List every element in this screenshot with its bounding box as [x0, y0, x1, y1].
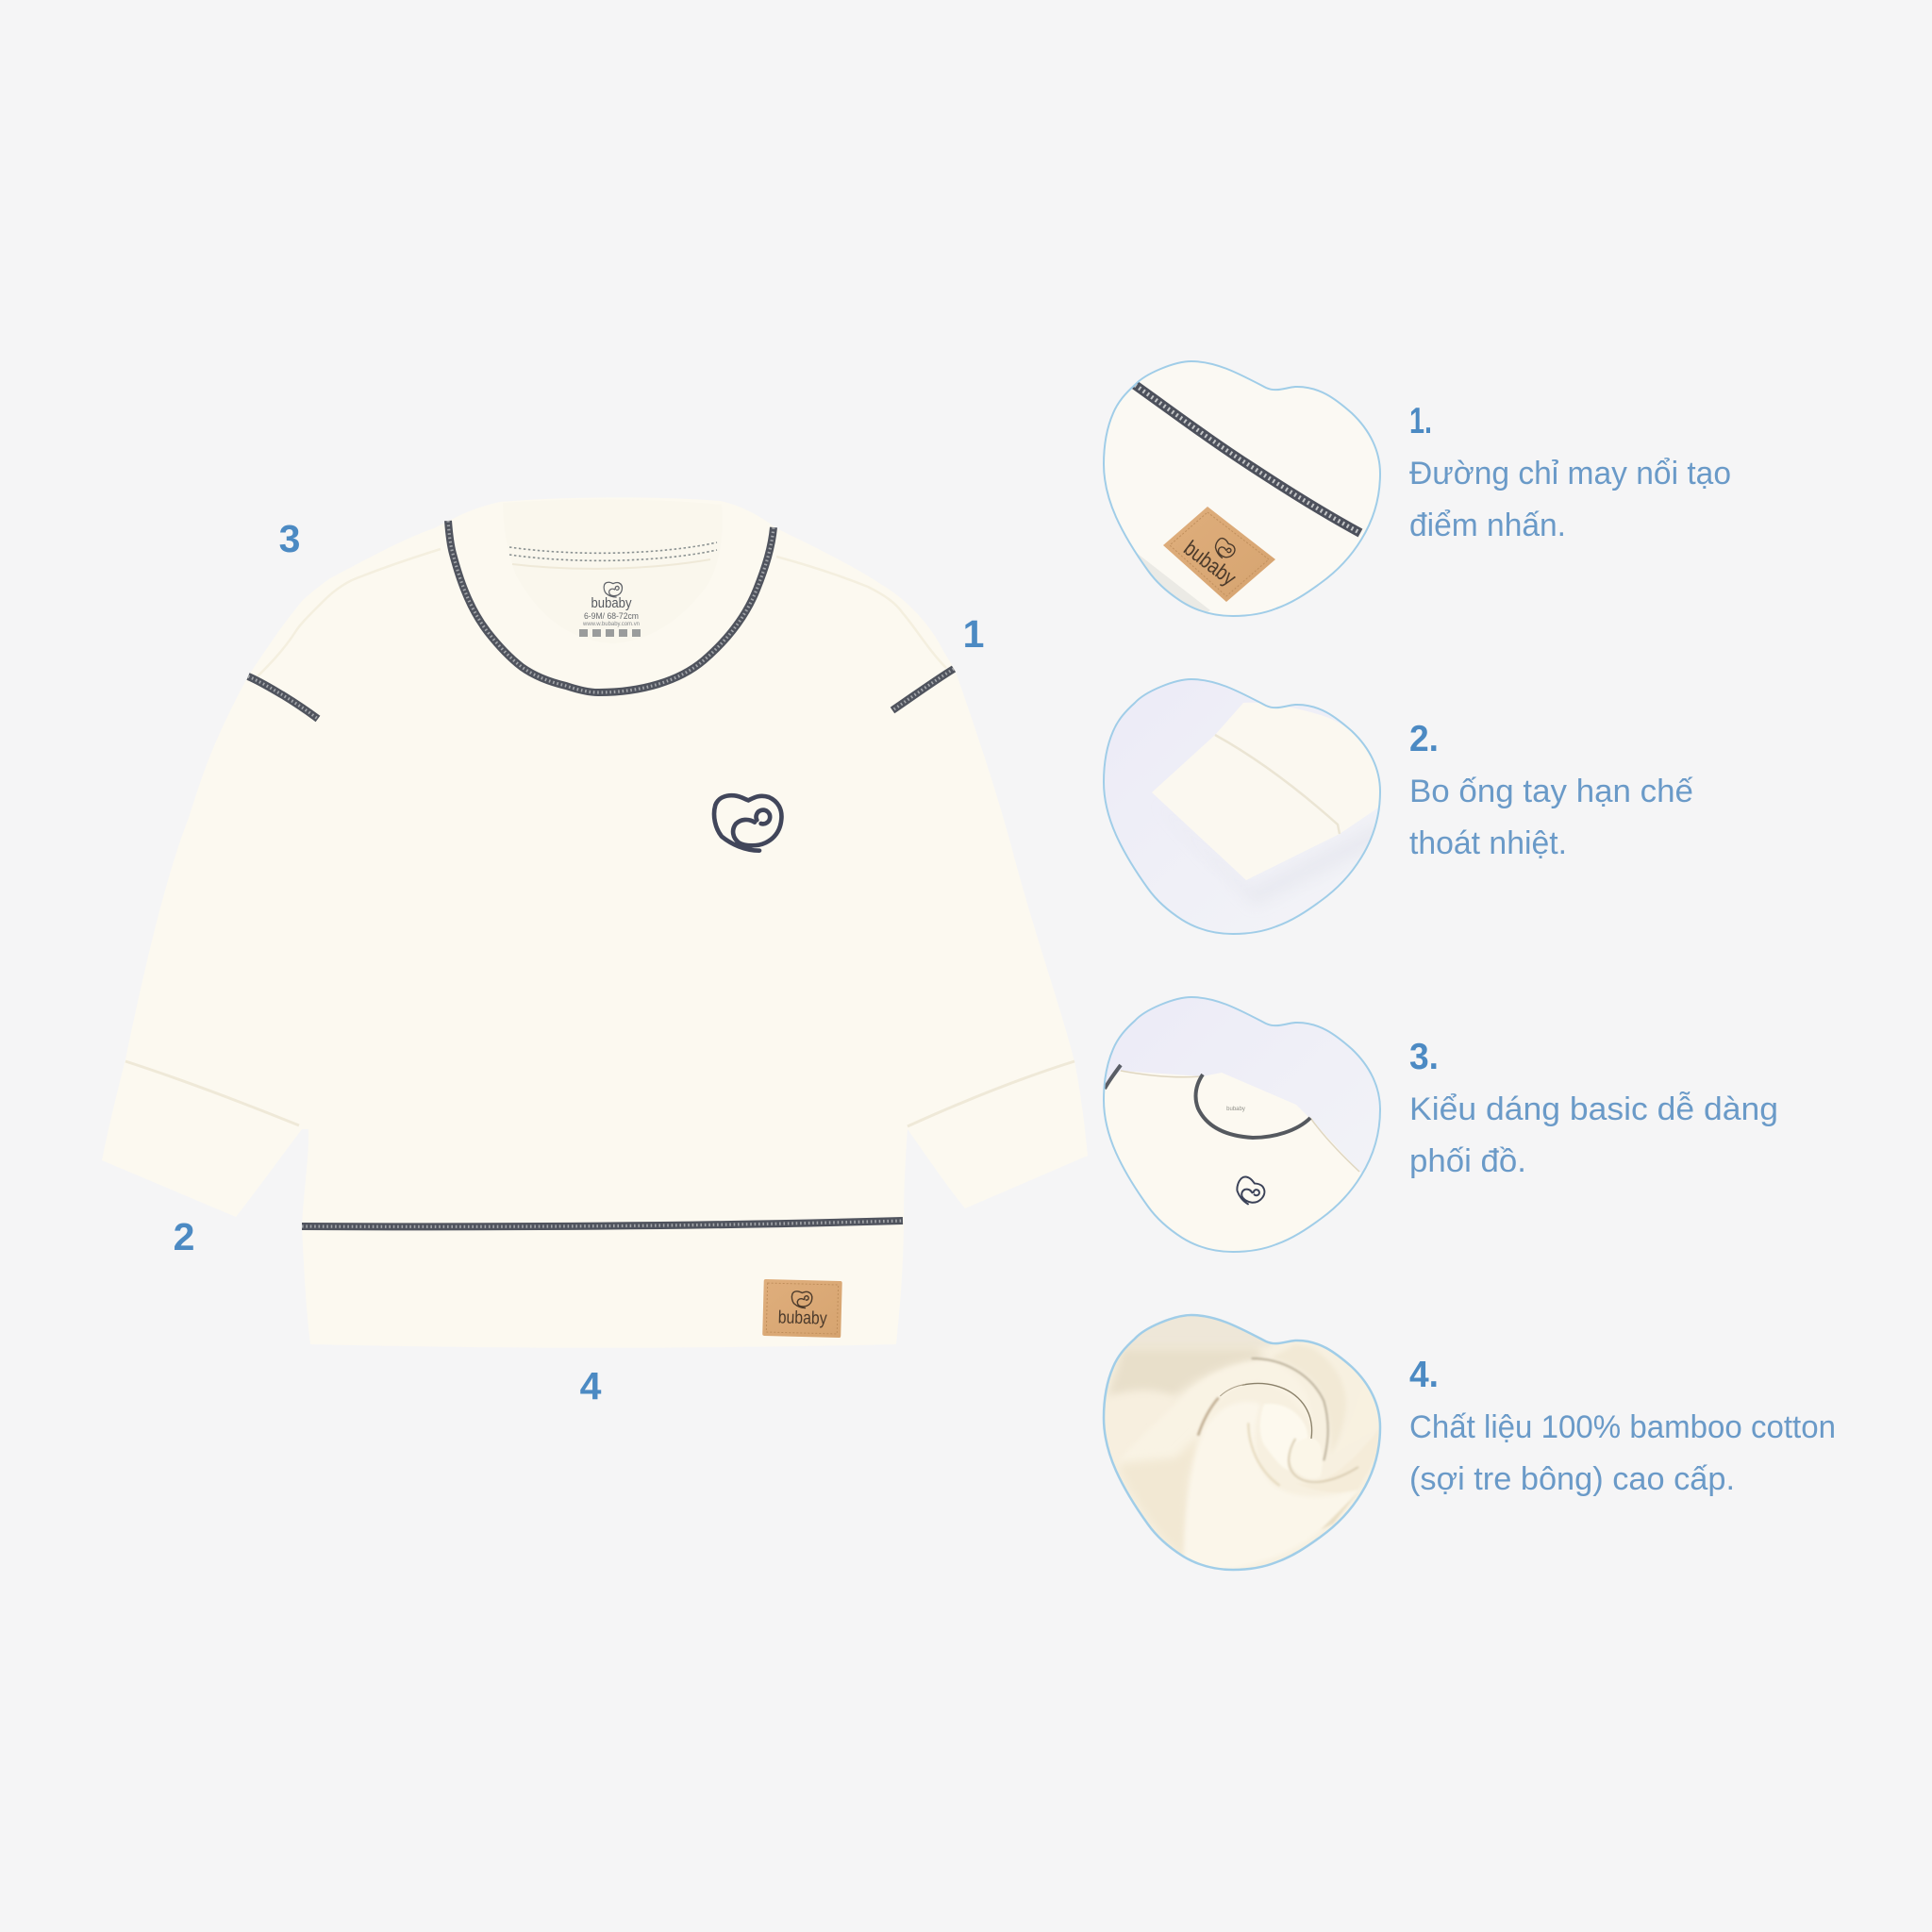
- sweater body and sleeves: [102, 497, 1088, 1348]
- neck label size: 6-9M/ 68-72cm: [584, 611, 639, 621]
- neck stitching: [448, 521, 774, 692]
- shoulder seams: [258, 549, 946, 676]
- neck label care icons: [579, 629, 641, 637]
- heart 1: stitching detail: [1104, 361, 1380, 618]
- feature 4 line 1: Chất liệu 100% bamboo cotton: [1409, 1409, 1836, 1445]
- label stitch: [766, 1283, 839, 1334]
- feature 3 line 2: phối đồ.: [1409, 1143, 1526, 1179]
- fabric folds: [1108, 1317, 1360, 1568]
- tag brand: bubaby: [1179, 536, 1241, 591]
- sleeve stitch: [1105, 1065, 1121, 1089]
- heart 2: cuff detail: [1104, 679, 1387, 934]
- marker 3: 3: [279, 517, 300, 560]
- neck label logo: [604, 582, 622, 597]
- cuff fold: [1215, 735, 1340, 834]
- feature 4 number: 4.: [1409, 1355, 1439, 1395]
- feature 1 line 2: điểm nhấn.: [1409, 508, 1566, 543]
- leather tag: [1163, 507, 1275, 602]
- heart 3: basic shape detail: [1104, 997, 1387, 1261]
- right sleeve stitching: [892, 669, 954, 710]
- stitch line: [1135, 385, 1360, 533]
- feature 2 line 2: thoát nhiệt.: [1409, 825, 1567, 861]
- shirt body: [1105, 1072, 1361, 1251]
- feature 1 number: 1.: [1409, 401, 1432, 441]
- feature 4 line 2: (sợi tre bông) cao cấp.: [1409, 1461, 1735, 1497]
- neck label url: www.w.bubaby.com.vn: [582, 622, 640, 627]
- neck label brand: bubaby: [591, 595, 632, 611]
- marker 4: 4: [580, 1364, 602, 1407]
- neck stitch: [1196, 1074, 1310, 1138]
- neck tag text: bubaby: [1226, 1107, 1245, 1112]
- shoulder seams: [1121, 1071, 1359, 1172]
- tag logo: [1215, 538, 1236, 558]
- back collar seam: [512, 559, 710, 569]
- feature 3 number: 3.: [1409, 1037, 1439, 1077]
- sleeve cuff: [1152, 703, 1387, 880]
- neck label: [579, 582, 641, 637]
- feature 2 text: [1409, 719, 1693, 861]
- label logo: [791, 1291, 812, 1308]
- feature 1 text: [1409, 401, 1731, 543]
- feature 3 text: [1409, 1037, 1778, 1179]
- cuff shadow: [1156, 802, 1382, 906]
- sweater product photo: [102, 497, 1088, 1348]
- chest embroidered logo: [714, 795, 781, 851]
- hem stitching: [302, 1221, 903, 1226]
- feature 4 text: [1409, 1355, 1836, 1497]
- left sleeve stitching: [248, 676, 318, 719]
- tag stitch: [1170, 512, 1269, 596]
- mini chest logo: [1236, 1175, 1266, 1206]
- feature 2 number: 2.: [1409, 719, 1439, 759]
- neck opening: [503, 499, 723, 643]
- feature 1 line 1: Đường chỉ may nổi tạo: [1409, 456, 1731, 491]
- cuff seams: [125, 1061, 1074, 1126]
- label brand: bubaby: [777, 1307, 827, 1329]
- back collar stitching lower: [509, 550, 717, 560]
- tan leather label: [762, 1279, 842, 1338]
- heart 4: fabric swirl: [1094, 1307, 1380, 1571]
- marker 2: 2: [174, 1215, 194, 1258]
- back collar stitching upper: [509, 542, 717, 553]
- marker 1: 1: [963, 612, 984, 656]
- feature 2 line 1: Bo ống tay hạn chế: [1409, 774, 1693, 809]
- feature 3 line 1: Kiểu dáng basic dễ dàng: [1409, 1091, 1778, 1127]
